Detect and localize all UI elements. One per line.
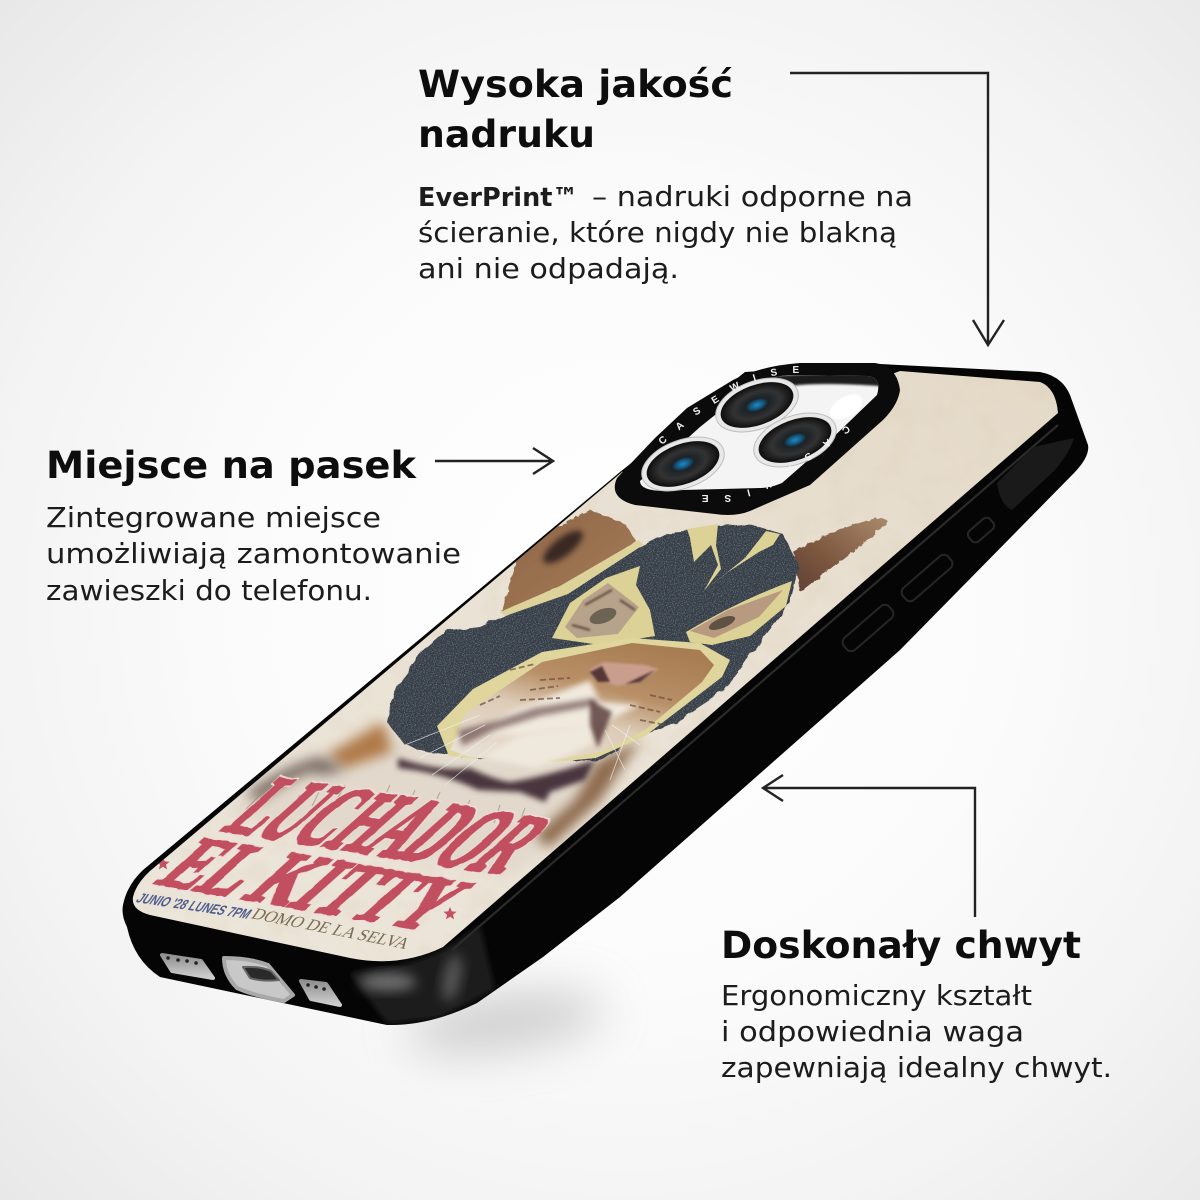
right neck brown bbox=[535, 740, 640, 848]
text: strap slot bbox=[46, 501, 461, 607]
venue line: DOMO DE LA SELVA bbox=[248, 905, 415, 953]
camera window bbox=[640, 375, 878, 491]
camera module bbox=[614, 363, 900, 515]
text: strap slot: Zintegrowane miejsce bbox=[46, 501, 381, 534]
arrow: strap slot bbox=[435, 448, 553, 474]
date line: JUNIO '28 LUNES 7PM bbox=[133, 891, 254, 922]
text: print quality: ani nie odpadają. bbox=[418, 252, 679, 285]
neck fur bbox=[227, 736, 566, 872]
text: grip: Ergonomiczny kształt bbox=[721, 979, 1032, 1012]
text: grip: zapewniają idealny chwyt. bbox=[721, 1051, 1112, 1084]
heading: grip: Doskonały chwyt bbox=[721, 924, 1081, 967]
left eye stripes bbox=[572, 590, 635, 630]
lens two bbox=[746, 403, 844, 477]
right eye bbox=[690, 590, 783, 638]
window top shadow bbox=[735, 370, 880, 402]
right eye pupil bbox=[708, 616, 736, 630]
callout: print quality bbox=[418, 63, 1004, 345]
star left bbox=[158, 859, 170, 870]
whisker marks bbox=[480, 664, 672, 725]
arrow: print quality bbox=[790, 73, 1004, 345]
nose bbox=[590, 662, 659, 686]
neck dark line bbox=[398, 758, 595, 802]
heading: print quality: Wysoka jakość bbox=[418, 63, 733, 106]
lightning bolt trim bbox=[687, 524, 780, 591]
text: grip: i odpowiednia waga bbox=[721, 1015, 1024, 1048]
shoulder grey stripes bbox=[245, 757, 345, 800]
text: grip bbox=[721, 979, 1112, 1084]
phone case illustration bbox=[122, 363, 1088, 1025]
face bbox=[450, 643, 714, 762]
mask brow trim bbox=[500, 540, 643, 616]
text: print quality: ścieranie, które nigdy nie blakną bbox=[418, 216, 897, 249]
nostrils bbox=[590, 666, 655, 684]
title LUCHADOR: LUCHADOR bbox=[200, 761, 578, 891]
eye trim left bbox=[552, 566, 655, 645]
text: print quality: – nadruki odporne na bbox=[592, 180, 913, 213]
brand text bottom: CASEWISE bbox=[702, 426, 850, 502]
camera surround bbox=[615, 363, 900, 515]
fur strokes bbox=[246, 785, 525, 824]
muzzle white bbox=[478, 680, 640, 735]
callout: grip bbox=[721, 775, 1112, 1084]
side grip pad bbox=[997, 438, 1074, 510]
phone shadow bbox=[402, 982, 608, 1062]
left eye bbox=[565, 583, 639, 638]
bottom corner gloss bbox=[350, 925, 495, 1024]
eye trim right bbox=[686, 581, 792, 645]
cheek shadow bbox=[458, 698, 598, 746]
side buttons bbox=[840, 516, 996, 654]
panel paper bbox=[133, 371, 1058, 961]
charging port bbox=[224, 958, 293, 1001]
charging hole bbox=[243, 967, 279, 981]
left speaker bbox=[162, 955, 213, 978]
text: strap slot: umożliwiają zamontowanie bbox=[46, 537, 461, 570]
window sheen bbox=[825, 389, 867, 425]
left ear dark patch bbox=[539, 525, 587, 569]
cat artwork bbox=[133, 510, 888, 953]
text: print quality bbox=[418, 180, 913, 285]
star right bbox=[443, 907, 457, 919]
arrow: grip bbox=[763, 775, 975, 917]
chin fur bbox=[483, 722, 595, 768]
lens one bbox=[708, 368, 806, 442]
grip highlight line bbox=[452, 425, 1058, 950]
printed back panel bbox=[133, 371, 1058, 961]
heading: print quality: nadruku bbox=[418, 113, 595, 156]
left ear bbox=[501, 510, 636, 612]
lens three bbox=[634, 427, 732, 501]
title EL KITTY: EL KITTY bbox=[136, 823, 493, 945]
brand text top: CASEWISE bbox=[659, 366, 799, 444]
whiskers bbox=[405, 715, 640, 785]
right speaker bbox=[301, 981, 340, 1005]
callout: strap slot bbox=[46, 444, 553, 607]
text: print quality: EverPrint™ bbox=[418, 183, 578, 213]
left eye pupil bbox=[590, 608, 616, 624]
bottom ports bbox=[162, 955, 340, 1005]
right ear bbox=[794, 517, 888, 592]
heading: print quality bbox=[418, 63, 733, 156]
mouth shadow bbox=[590, 700, 612, 748]
dark mask bbox=[387, 524, 799, 762]
shoulder orange bbox=[327, 722, 392, 768]
text: strap slot: zawieszki do telefonu. bbox=[46, 574, 372, 607]
case silhouette bbox=[122, 364, 1088, 1025]
heading: strap slot: Miejsce na pasek bbox=[46, 444, 417, 487]
face trim bbox=[437, 638, 730, 762]
